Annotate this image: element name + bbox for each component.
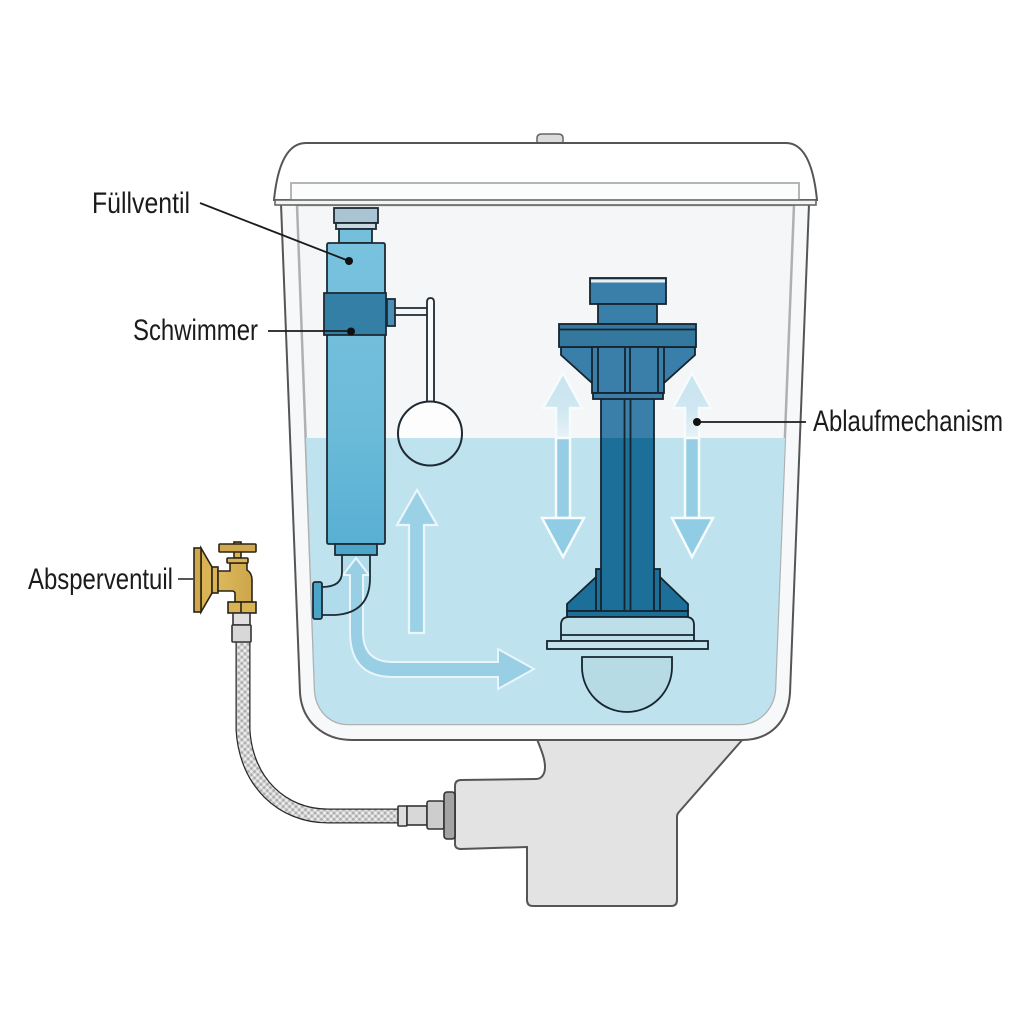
base flange xyxy=(547,641,708,649)
inlet nut xyxy=(444,792,455,839)
elbow flange xyxy=(313,582,322,619)
lid knob xyxy=(537,134,563,143)
column below water xyxy=(601,438,654,611)
tap handle xyxy=(219,544,256,552)
tap body xyxy=(218,563,252,602)
collar line xyxy=(559,328,696,330)
cap highlight xyxy=(591,280,665,282)
float connector xyxy=(387,299,395,326)
valve cap xyxy=(334,208,378,223)
panel: tank lid xyxy=(274,134,817,205)
tap bonnet xyxy=(227,558,248,563)
lid bottom edge xyxy=(275,200,816,205)
wall plate xyxy=(194,548,201,612)
right down head xyxy=(672,518,713,557)
column above water xyxy=(601,399,654,438)
float ball top xyxy=(398,402,462,466)
drain neck xyxy=(598,304,657,324)
flush dome xyxy=(582,657,672,712)
panel: hose end fittings xyxy=(398,792,455,839)
tap stem xyxy=(234,542,241,558)
float arm xyxy=(395,308,428,315)
column outline and centre strip xyxy=(601,399,654,611)
panel: shut-off valve xyxy=(194,542,256,613)
panel: flexible hose xyxy=(243,640,400,816)
elbow fill xyxy=(322,555,370,615)
left gusset xyxy=(567,577,596,611)
right side rib xyxy=(654,569,660,611)
tank inner wall xyxy=(297,205,794,724)
water xyxy=(306,438,785,724)
label: Schwimmer: Schwimmer xyxy=(133,314,258,347)
panel: hose top fittings xyxy=(232,613,251,642)
valve neck xyxy=(339,229,372,243)
tap nut xyxy=(228,602,256,613)
right shaft in water xyxy=(685,438,699,518)
panel: fill valve xyxy=(324,208,395,555)
base cap line xyxy=(561,634,694,636)
drain centre block xyxy=(592,347,664,393)
tank outer wall xyxy=(281,204,809,740)
drain collar xyxy=(559,324,696,347)
arrow: inlet flow to the right xyxy=(343,558,534,689)
base bar xyxy=(567,611,688,617)
flange ring xyxy=(212,567,218,593)
hose braid xyxy=(243,640,400,816)
elbow pipe outline xyxy=(322,555,370,615)
drain plate xyxy=(593,393,663,399)
label: Füllventil: Füllventil xyxy=(92,187,190,220)
float rod xyxy=(427,298,434,402)
label: Füllventil xyxy=(92,187,353,265)
right gusset xyxy=(660,577,688,611)
panel: drain mechanism xyxy=(547,278,708,712)
arrow: vertical fill flow xyxy=(397,490,437,633)
float ball outline xyxy=(398,402,462,466)
panel: tank body xyxy=(281,204,809,740)
lower ferrule xyxy=(232,625,251,642)
lid inner rim xyxy=(291,183,799,200)
valve body xyxy=(327,243,385,544)
arrow: right up arrow xyxy=(672,373,713,557)
label: Ablaufmechanism xyxy=(693,405,1003,438)
lid shell xyxy=(274,143,817,200)
left down head xyxy=(542,518,584,557)
drain trapezoid xyxy=(561,347,695,383)
panel: float arm and ball xyxy=(395,298,462,466)
valve lower collar xyxy=(335,544,377,555)
base cap xyxy=(561,617,694,641)
left up arrow above water xyxy=(543,373,582,438)
right up arrow above water xyxy=(673,373,711,438)
crimp xyxy=(398,806,407,826)
left side rib xyxy=(596,569,601,611)
float ball submerged xyxy=(398,438,462,466)
wall flange cone xyxy=(201,548,212,612)
panel: outlet body xyxy=(455,739,743,906)
arrow: left up arrow xyxy=(542,373,584,557)
drain top cap xyxy=(590,278,666,304)
left shaft in water xyxy=(556,438,570,518)
label: Absperventuil: Absperventuil xyxy=(28,563,173,596)
upper ferrule xyxy=(233,613,250,625)
valve cap ring xyxy=(336,223,376,229)
hex nut xyxy=(427,801,444,829)
hose outline xyxy=(243,640,400,816)
connector pipe xyxy=(407,806,427,825)
panel: valve elbow xyxy=(313,555,370,619)
float band xyxy=(324,293,386,335)
